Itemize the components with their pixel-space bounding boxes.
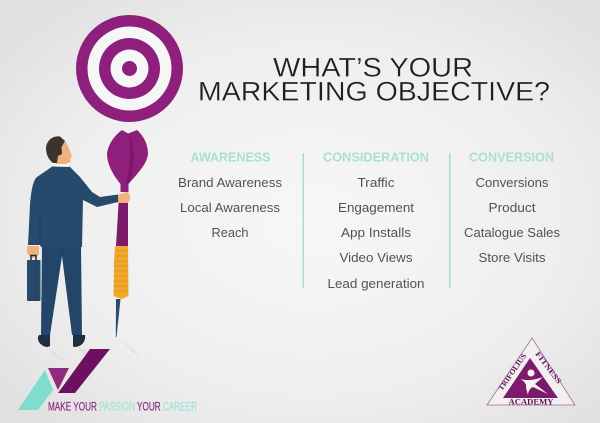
- jacket: [28, 166, 118, 247]
- panel: awareness: Reach: [212, 226, 249, 240]
- logo: triple fitness academy: TRIFOLIUS: [496, 352, 528, 392]
- icon: dart: [107, 130, 148, 358]
- panel: conversion: Store Visits: [478, 251, 546, 265]
- divider: awareness / consideration: [302, 153, 304, 288]
- shoes: [38, 335, 50, 347]
- divider: consideration / conversion: [449, 153, 450, 288]
- title: [198, 52, 550, 106]
- panel: conversion: Catalogue Sales: [464, 226, 560, 240]
- panel: conversion: [464, 150, 560, 265]
- shirt collar: [53, 163, 70, 167]
- panel: awareness: Local Awareness: [180, 201, 280, 215]
- panel: consideration: App Installs: [341, 226, 411, 240]
- panel: consideration: [323, 150, 429, 291]
- panel: consideration: Engagement: [338, 201, 415, 215]
- logo: triple fitness academy: ACADEMY: [508, 398, 554, 406]
- panel: awareness: [178, 150, 282, 240]
- icon: target: [76, 15, 183, 122]
- logo: triple fitness academy: FITNESS: [533, 350, 563, 386]
- panel: conversion: Conversions: [476, 176, 548, 190]
- panel: consideration: Traffic: [358, 176, 394, 190]
- panel: conversion: CONVERSION: [469, 150, 554, 164]
- logo: make your passion your career: MAKE YOUR PASSION YOUR CAREER: [48, 402, 197, 414]
- title: MARKETING OBJECTIVE?: [198, 76, 550, 106]
- head: [54, 139, 72, 164]
- panel: consideration: Video Views: [340, 251, 412, 265]
- icon: businessman: [27, 136, 130, 362]
- trousers: [41, 246, 82, 335]
- briefcase: [27, 256, 40, 301]
- panel: conversion: Product: [488, 201, 536, 215]
- right hand on dart: [117, 192, 130, 203]
- title: WHAT’S YOUR: [273, 52, 473, 82]
- panel: consideration: CONSIDERATION: [323, 150, 429, 164]
- left hand: [27, 246, 39, 258]
- logo: make your passion your career: [18, 349, 197, 414]
- panel: consideration: Lead generation: [328, 277, 425, 291]
- logo: triple fitness academy: [487, 338, 575, 406]
- panel: awareness: Brand Awareness: [178, 176, 282, 190]
- panel: awareness: AWARENESS: [190, 150, 270, 164]
